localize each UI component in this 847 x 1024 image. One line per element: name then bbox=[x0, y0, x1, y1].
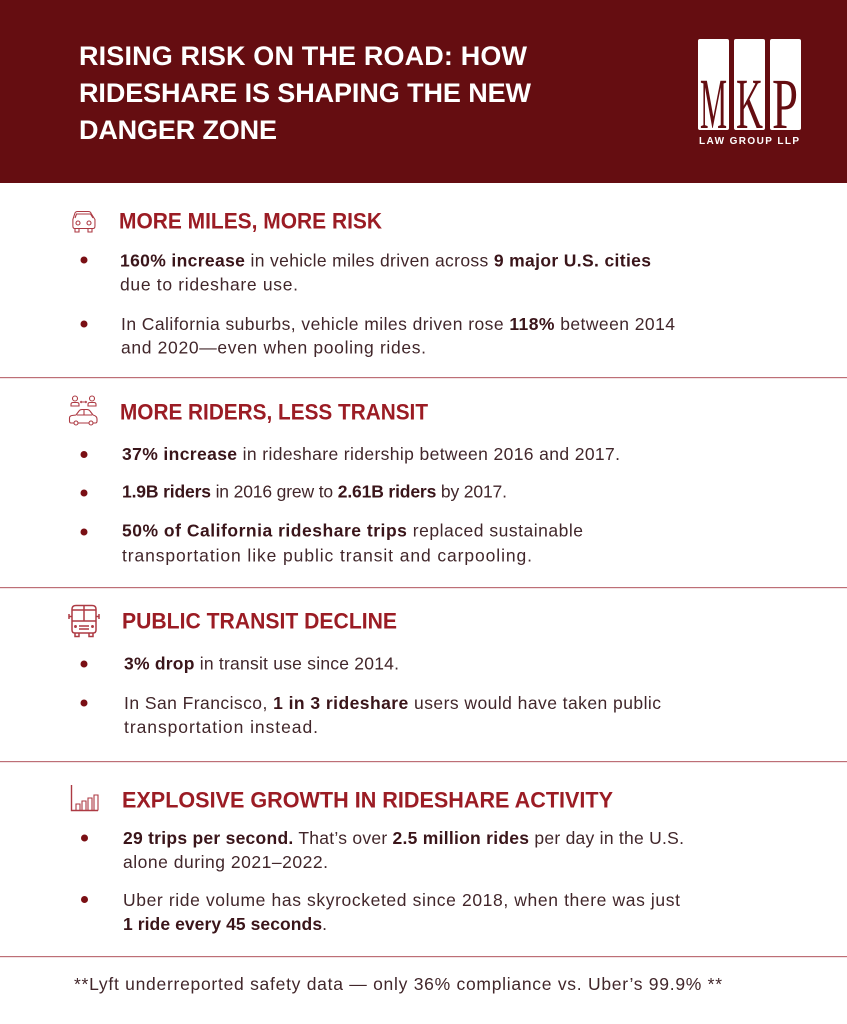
footnote: **Lyft underreported safety data — only 36% compliance vs. Uber’s 99.9% ** bbox=[74, 974, 722, 994]
bullet 2: and 2020—even when pooling rides. bbox=[121, 338, 426, 358]
bullet 2: 1.9B riders in 2016 grew to 2.61B riders by 2017. bbox=[122, 482, 507, 502]
bullet 3: transportation like public transit and carpooling. bbox=[122, 546, 532, 566]
logo: MKP Law Group LLP: K bbox=[736, 64, 763, 144]
icon: bar chart bbox=[72, 785, 98, 810]
bullet 2: In California suburbs, vehicle miles driven rose 118% between 2014 bbox=[121, 314, 675, 334]
icon: riders and car bbox=[70, 396, 97, 425]
bullet 2: Uber ride volume has skyrocketed since 2018, when there was just bbox=[123, 890, 680, 910]
logo: MKP Law Group LLP: M bbox=[700, 64, 727, 144]
title bbox=[79, 41, 532, 145]
heading: MORE MILES, MORE RISK bbox=[119, 208, 382, 234]
bullet 3: 50% of California rideshare trips replaced sustainable bbox=[122, 520, 583, 540]
title: RIDESHARE IS SHAPING THE NEW bbox=[79, 78, 532, 108]
bullet 1: 29 trips per second. That’s over 2.5 million rides per day in the U.S. bbox=[123, 828, 684, 848]
bullet 1: 3% drop in transit use since 2014. bbox=[124, 654, 399, 674]
bullet 2 bbox=[80, 314, 675, 358]
bullet 1: 37% increase in rideshare ridership between 2016 and 2017. bbox=[122, 444, 620, 464]
icon: bus bbox=[69, 606, 99, 636]
section: public transit decline bbox=[69, 606, 661, 737]
bullet 2: transportation instead. bbox=[124, 717, 318, 737]
bullet 1 bbox=[80, 250, 651, 294]
heading: PUBLIC TRANSIT DECLINE bbox=[122, 608, 397, 634]
bullet 1: 160% increase in vehicle miles driven across 9 major U.S. cities bbox=[120, 250, 651, 270]
header banner bbox=[0, 0, 847, 183]
heading: EXPLOSIVE GROWTH IN RIDESHARE ACTIVITY bbox=[122, 788, 613, 812]
icon: car bbox=[73, 212, 95, 232]
bullet 2 bbox=[80, 693, 661, 737]
logo: MKP Law Group LLP: LAW GROUP LLP bbox=[699, 136, 799, 147]
bullet 2 bbox=[81, 890, 680, 934]
bullet 1: alone during 2021–2022. bbox=[123, 852, 328, 872]
bullet 2: 1 ride every 45 seconds. bbox=[123, 914, 327, 934]
title: DANGER ZONE bbox=[79, 115, 277, 145]
bullet 3 bbox=[80, 520, 583, 566]
title: RISING RISK ON THE ROAD: HOW bbox=[79, 41, 528, 71]
bullet 1: due to rideshare use. bbox=[120, 274, 298, 294]
logo: MKP Law Group LLP bbox=[698, 39, 801, 147]
heading: MORE RIDERS, LESS TRANSIT bbox=[120, 400, 429, 424]
section: more riders, less transit bbox=[70, 396, 620, 566]
bullet 2: In San Francisco, 1 in 3 rideshare users would have taken public bbox=[124, 693, 661, 713]
section: more miles, more risk bbox=[73, 208, 675, 358]
bullet 1 bbox=[81, 828, 684, 872]
logo: MKP Law Group LLP: P bbox=[772, 64, 798, 144]
section: explosive growth in rideshare activity bbox=[72, 785, 684, 934]
